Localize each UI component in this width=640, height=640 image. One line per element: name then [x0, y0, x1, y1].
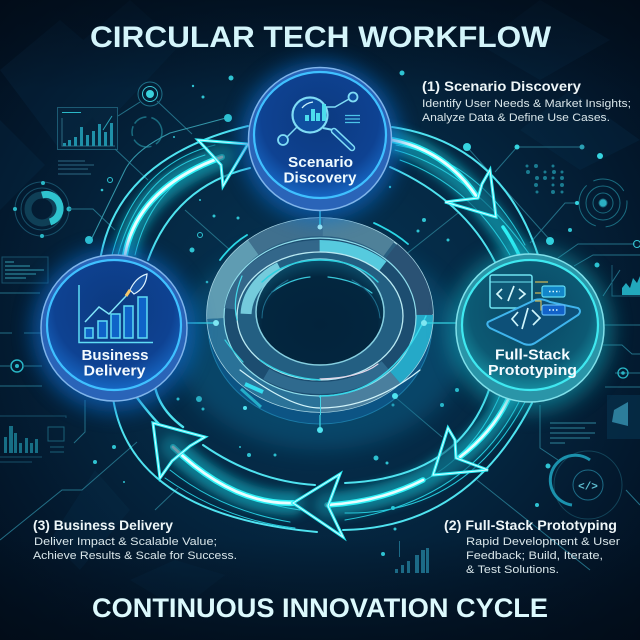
arrow 2: scenario to prototyping — [390, 127, 538, 262]
text block: full-stack prototyping — [444, 518, 620, 576]
text block: scenario discovery: Identify User Needs & Market Insights; — [422, 98, 631, 110]
bottom-left bars — [0, 416, 66, 462]
text block: full-stack prototyping: Feedback; Build, Iterate, — [466, 550, 603, 562]
text block: full-stack prototyping: & Test Solutions. — [466, 564, 559, 576]
target icon — [118, 82, 192, 134]
middle band segments — [230, 246, 410, 388]
bar chart right — [612, 265, 640, 296]
arrow 1: business to scenario — [101, 126, 250, 260]
node: scenario discovery: Discovery — [284, 170, 356, 186]
left tech decorations — [0, 82, 230, 540]
text block: full-stack prototyping: (2) Full-Stack Prototyping — [444, 518, 617, 533]
rising bars — [395, 541, 429, 573]
icon: chart with rocket — [79, 274, 153, 342]
icon: tablet — [487, 299, 580, 345]
node: business delivery — [32, 248, 196, 412]
icon: chat bubbles — [535, 282, 548, 310]
text block: scenario discovery: (1) Scenario Discovery — [422, 79, 582, 94]
title: CIRCULAR TECH WORKFLOW — [90, 21, 552, 54]
text block: business delivery: (3) Business Delivery — [33, 518, 174, 533]
terminal panel — [2, 257, 48, 283]
label: Full-Stack — [495, 348, 571, 364]
text block: business delivery: Achieve Results & Scale for Success. — [33, 550, 237, 562]
mini bar chart panel — [58, 108, 118, 150]
scattered particles — [85, 70, 600, 556]
right tech decorations — [395, 143, 640, 573]
arrow 4: bottom to business — [113, 387, 343, 537]
node: scenario discovery — [240, 61, 400, 221]
connector lines left — [0, 118, 230, 540]
inner band segment — [246, 258, 394, 374]
node: business delivery: Delivery — [84, 364, 146, 380]
node: full-stack prototyping — [448, 248, 612, 412]
hole — [256, 259, 384, 365]
ring body — [208, 226, 432, 424]
target right — [618, 368, 628, 378]
icon: magnifier with chart — [278, 92, 360, 148]
donut gauge — [13, 181, 115, 238]
dot matrix — [526, 164, 564, 194]
text block: business delivery — [33, 518, 237, 562]
label: Business — [82, 348, 148, 364]
code dial: </> — [578, 482, 598, 494]
code panel — [550, 395, 640, 443]
code dial — [550, 451, 622, 519]
text block: scenario discovery — [422, 79, 631, 124]
text lines — [58, 161, 94, 174]
outer accent arcs — [220, 223, 408, 260]
subtitle footer: CONTINUOUS INNOVATION CYCLE — [92, 593, 548, 623]
ring connectors — [187, 205, 456, 433]
ring base highlights — [241, 384, 321, 415]
node: full-stack prototyping: Prototyping — [488, 363, 577, 379]
outer band segments — [216, 227, 424, 403]
central glass ring — [175, 218, 465, 450]
ring dial — [132, 117, 162, 147]
target left — [0, 360, 42, 372]
arrow glow layer — [125, 140, 520, 505]
text block: full-stack prototyping: Rapid Development & User — [466, 536, 620, 548]
circuit lines — [395, 147, 640, 570]
icon: code window — [487, 275, 580, 345]
label: Scenario — [288, 155, 353, 171]
arrow 3: prototyping to bottom — [327, 387, 532, 530]
text block: scenario discovery: Analyze Data & Define Use Cases. — [422, 112, 610, 124]
text block: business delivery: Deliver Impact & Scalable Value; — [34, 536, 217, 548]
radar — [579, 179, 627, 227]
inner reflections — [225, 260, 426, 408]
